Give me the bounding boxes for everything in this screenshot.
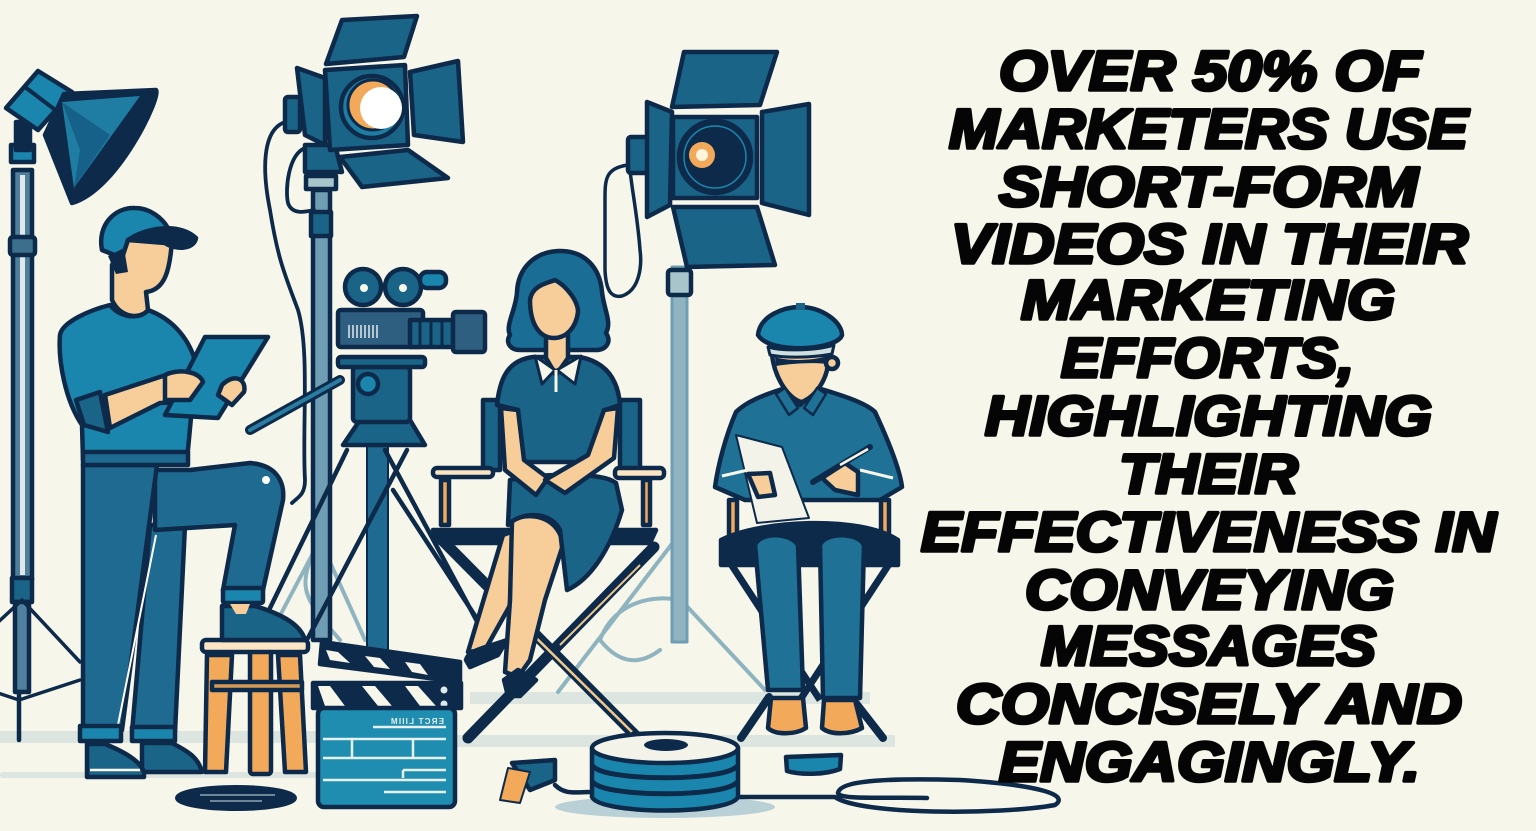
camera head <box>250 269 485 430</box>
barn-door light right <box>605 52 809 642</box>
headline text <box>921 39 1498 793</box>
tripod <box>270 420 487 650</box>
slate label: ERCT LIIIM <box>390 717 444 726</box>
head with cap <box>101 208 196 316</box>
front leg <box>80 465 157 777</box>
film reel stack <box>592 733 738 810</box>
floor cable <box>555 779 1059 812</box>
seated man with script <box>715 303 902 738</box>
arms and hands <box>501 408 618 495</box>
film camera on tripod <box>250 269 487 650</box>
stand and cable <box>605 165 691 642</box>
softbox light on stand <box>0 71 157 740</box>
stand and cable <box>265 122 342 640</box>
sweater torso <box>715 388 902 500</box>
softbox head <box>6 71 157 203</box>
floor shadows <box>0 692 895 818</box>
headline text: MESSAGES <box>1041 614 1376 677</box>
script paper <box>736 435 809 523</box>
headline text: HIGHLIGHTING <box>985 384 1432 447</box>
back leg and raised leg <box>132 463 305 772</box>
headline text: MARKETERS USE <box>949 97 1470 160</box>
power plug <box>500 760 555 803</box>
stand pole <box>0 145 80 740</box>
headline text: SHORT-FORM <box>999 155 1420 218</box>
background stand legs <box>275 540 765 692</box>
hands and pen <box>722 447 893 497</box>
film ring on floor <box>177 787 295 809</box>
headline text: ENGAGINGLY. <box>999 730 1420 793</box>
torso shirt <box>60 305 195 465</box>
tablet <box>165 337 268 418</box>
head and hair <box>508 251 608 392</box>
lamp head with doors <box>285 16 463 187</box>
arm and hand <box>76 372 202 432</box>
clapper arm <box>320 642 460 682</box>
lamp head with doors <box>628 52 809 267</box>
dress torso and skirt <box>497 357 622 590</box>
headline text: MARKETING <box>1021 268 1395 331</box>
legs and shoes <box>466 516 563 696</box>
headline text: OVER 50% OF <box>999 39 1423 102</box>
headline text: EFFORTS, <box>1061 326 1354 389</box>
clapperboard <box>313 642 461 807</box>
headline text: VIDEOS IN THEIR <box>951 212 1469 275</box>
woman in director chair <box>433 251 664 738</box>
tape roll <box>786 755 841 774</box>
headline text: EFFECTIVENESS IN <box>921 500 1498 563</box>
headline text: THEIR <box>1119 442 1299 505</box>
chair <box>721 500 898 738</box>
headline text: CONVEYING <box>1025 558 1394 621</box>
slate board <box>318 708 455 807</box>
legs and shoes <box>755 535 864 733</box>
head and beret <box>758 303 842 415</box>
standing crew man <box>60 208 305 777</box>
chair frame <box>433 400 664 738</box>
wooden stool <box>202 640 308 774</box>
headline text: CONCISELY AND <box>956 672 1462 735</box>
barn-door light left <box>265 16 463 640</box>
